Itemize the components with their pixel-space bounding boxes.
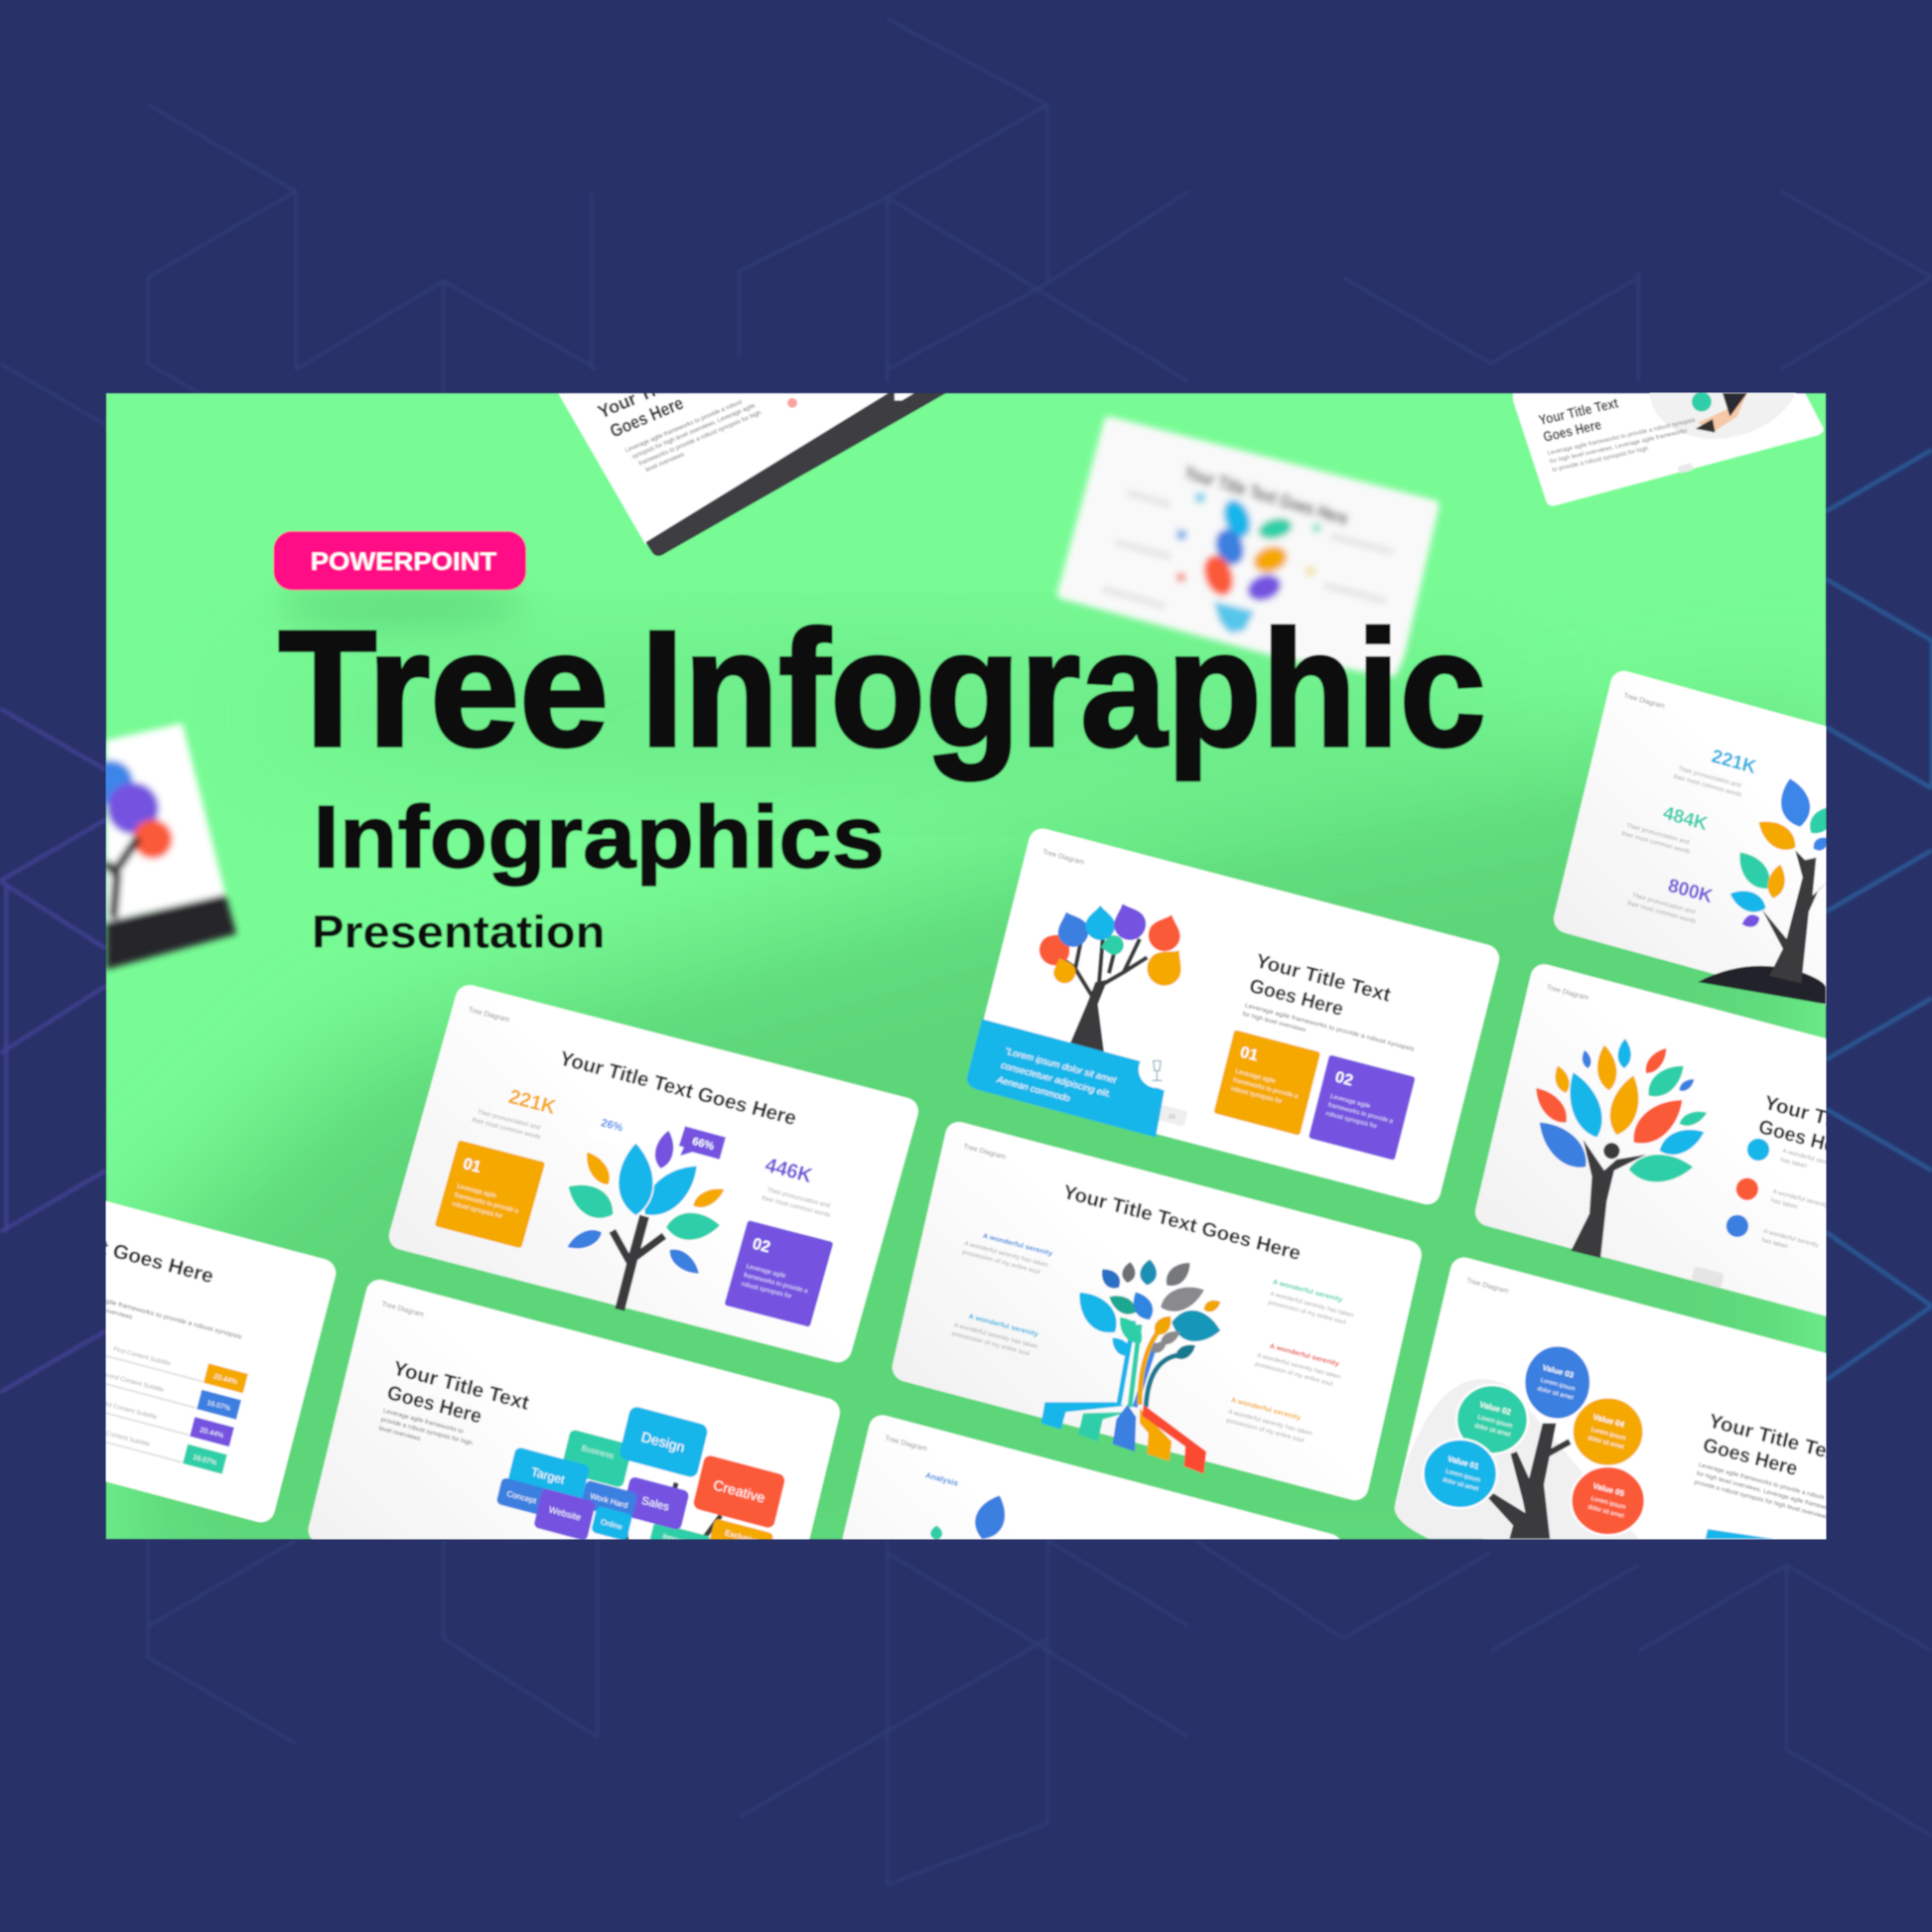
quote band corner [1685,1522,1774,1542]
tag: Tree Diagram: Tree Diagram [1546,983,1589,1002]
tag: Creative: Creative [712,1477,766,1507]
title text: Your Title Text [1707,1411,1847,1467]
tree illustration [1698,775,1841,1004]
body text: Leverage agile frameworks to provide a robust synopsis [70,1289,242,1340]
page number [1157,1104,1187,1127]
tag: Work Hard [580,1480,638,1521]
egg: Value 04: Lorem ipsum [1590,1426,1626,1442]
box: 02 [724,1220,834,1327]
row 1 [111,1339,248,1393]
box: 01: Leverage agile [456,1182,497,1200]
card: slide with drop tree and blue band: for high level overviews [1242,1011,1307,1034]
box: 01: robust synopsis for [452,1200,503,1220]
card: right upper slide with 221K stats: Their pronunciation and [1631,892,1697,916]
item: orange: A wonderful serenity has taken [1228,1409,1313,1438]
egg: Value 05: Value 05 [1592,1481,1625,1498]
tag: Website: Website [548,1504,582,1523]
tag: Innovation [644,1522,712,1576]
card: blurred slide behind title: Your Title Text Goes Here [1181,462,1351,530]
item: red: possession of my entire soul [1254,1360,1333,1388]
tag: Business [560,1429,632,1488]
tag: Tree Diagram: Tree Diagram [381,1300,425,1318]
tag: Concept: Concept [506,1489,538,1506]
egg: Value 03: dolor sit amet [1537,1385,1575,1402]
body text: Leverage agile frameworks to [382,1408,465,1436]
card: right upper slide with 221K stats: Their pronunciation and [1626,822,1691,846]
card: slide with stats and leaf tree: Their pronunciation and [766,1186,831,1209]
box: 01: frameworks to provide a [454,1191,519,1215]
card: slide with tag tree: provide a robust synopsis for high [380,1416,474,1448]
egg: Value 01: Value 01 [1447,1454,1480,1471]
stat: 484K: 484K [1661,803,1710,835]
card: top right slide [1513,310,1824,506]
badge: POWERPOINT [274,531,526,590]
card: slide with tag tree: Goes Here [385,1382,483,1428]
tree illustration [1034,898,1192,1052]
title text: Your Ti [595,380,658,423]
callout: 26%: 26% [600,1117,624,1135]
item: orange [1226,1396,1316,1446]
egg: Value 01 [1423,1440,1497,1508]
tag: Work Hard: Work Hard [589,1491,629,1510]
subtitle: Presentation: Presentation [312,905,605,957]
panel: green hero [105,393,1827,1539]
item: blue: A wonderful serenity [982,1232,1053,1258]
tag: Tree Diagram: Tree Diagram [1623,692,1666,711]
title text [1537,397,1696,473]
title text: Goes Here [1542,417,1603,446]
title: Tree Infographic: Tree [278,597,609,781]
egg: Value 01: dolor sit amet [1442,1476,1479,1493]
leaf tree illustration [560,1128,729,1310]
quote band [967,1019,1175,1138]
callout: 66%: 66% [691,1136,716,1153]
subtitle: Infographics: Infographics [313,787,885,887]
box: 01: 01 [461,1155,483,1176]
leaf icon [930,1490,1013,1544]
egg: Value 02: Value 02 [1478,1400,1512,1417]
egg: Value 03 [1524,1345,1590,1420]
row 2: 16.07% [207,1399,232,1413]
egg: Value 01: Lorem ipsum [1445,1468,1481,1484]
tag: Innovation: Innovation [662,1532,698,1550]
row 3: 20.44% [199,1426,225,1440]
title text: Your Title Text [1762,1092,1902,1149]
tag: Creative [692,1454,786,1529]
item: teal right [1268,1278,1358,1327]
tag: Online [591,1505,632,1541]
quote band: Aenean commodo [995,1074,1071,1104]
tag: Concept [496,1477,549,1516]
tag: Exclusive [704,1518,774,1578]
card: top centre slide [558,345,946,556]
tag: Exclusive: Exclusive [724,1528,759,1546]
item: teal left: possession of my entire soul [951,1330,1031,1357]
body text: Leverage agile frameworks to provide a robust [1698,1461,1825,1501]
tree trunk [1488,1423,1556,1539]
title text [596,393,761,473]
card: slide with person tree: Goes Here [1756,1116,1855,1163]
tag: Business: Business [581,1444,615,1460]
egg: Value 03: Value 03 [1542,1363,1576,1380]
box: 02: frameworks to provide a [1327,1101,1394,1125]
badge: POWERPOINT: POWERPOINT [311,549,496,576]
row 3: Third Content Subtitle [96,1399,158,1421]
quote band: consectetuer adipiscing elit. [1000,1060,1112,1099]
egg: Value 04: Value 04 [1592,1413,1625,1430]
title text: Leverage agile frameworks to provide a robust synopsis [1547,417,1696,457]
title text: Your Title Text [1254,950,1393,1007]
card: slide with tag tree [306,1277,843,1666]
item: teal right: A wonderful serenity [1272,1278,1343,1304]
box: 01 [1213,1030,1320,1136]
stat: 221K: 221K [1710,746,1758,778]
body text: Leverage agile frameworks to provide a robust synopsis [1244,1002,1415,1053]
egg: Value 02: Lorem ipsum [1477,1414,1513,1430]
row 4 [84,1418,227,1474]
title text: Your Title Text Goes Here [1061,1181,1303,1265]
title text: Your Title Text [1537,395,1620,429]
row 2: Second Content Subtitle [97,1370,165,1394]
title text: Goes Here [607,392,686,442]
title: Tree Infographic: Infographic [640,597,1486,781]
callout: 66% [679,1126,726,1160]
item: red [1254,1339,1345,1390]
card: slide with value eggs: Goes Here [1701,1435,1799,1480]
item: orange: A wonderful serenity [1230,1396,1302,1422]
tag: Tree Diagram: Tree Diagram [963,1143,1007,1161]
stat: 221K: 221K [506,1086,559,1119]
row 4: 16.07% [192,1453,218,1467]
card: slide with drop tree and blue band [967,826,1502,1207]
item: red: A wonderful serenity has taken [1256,1352,1342,1381]
title text: to provide a robust synopsis for high [1552,445,1649,474]
box: 02: robust synopsis for [741,1281,792,1301]
card: slide with tag tree: level overviews [378,1425,421,1443]
tag: Target [506,1447,590,1505]
card: slide with person tree [1472,961,1932,1348]
tag: Tree Diagram: Tree Diagram [1465,1277,1509,1296]
tag: Tree Diagram: Tree Diagram [468,1006,510,1024]
card: slide with person tree: A wonderful serenity [1772,1188,1830,1209]
tag: Target: Target [530,1464,567,1487]
ribbon tree illustration [1041,1257,1223,1473]
card: blurred slide behind title [1062,421,1435,671]
box: 02: robust synopsis for [1325,1110,1378,1130]
icons: list bullets [1726,1139,1769,1237]
box: 02 [1309,1054,1416,1161]
egg: Value 05 [1571,1466,1645,1535]
item: blue: possession of my entire soul [962,1249,1040,1276]
egg: Value 05: Lorem ipsum [1590,1495,1626,1511]
card: right upper slide with 221K stats: their most common words [1626,899,1697,925]
egg: Value 04 [1573,1397,1644,1466]
title: Tree Infographic [278,597,1486,781]
title text: level overviews [644,451,686,474]
card: slide with person tree: has taken [1761,1237,1789,1250]
row 3 [95,1392,234,1447]
tag: Online: Online [600,1517,623,1532]
box: 01: 01 [1238,1043,1260,1065]
tree illustration [1529,1038,1709,1258]
item: blue [962,1228,1053,1278]
item: orange: possession of my entire soul [1226,1417,1305,1445]
item: teal left: A wonderful serenity [968,1312,1039,1338]
box: 01: Leverage agile [1235,1068,1277,1085]
egg: Value 02 [1456,1385,1528,1453]
title text: Leverage agile frameworks to provide a robust [624,398,744,455]
box: 02: 02 [751,1235,772,1257]
egg: Value 02: dolor sit amet [1473,1422,1511,1439]
tag: Tree Diagram: Tree Diagram [885,1435,928,1453]
egg: Value 05: dolor sit amet [1587,1503,1625,1520]
row 1: First Content Subtitle [112,1345,172,1368]
tag: Sales [621,1476,690,1531]
tag: Website [533,1488,596,1541]
card: blurred left slide [88,724,236,970]
item: teal left: A wonderful serenity has taken [953,1321,1038,1350]
card: right upper slide with 221K stats: Their pronunciation and [1678,765,1742,789]
box: 01 [435,1140,545,1248]
box: 02: Leverage agile [746,1263,787,1280]
stat: 800K: 800K [1666,876,1715,907]
card: slide with stats and leaf tree [386,982,921,1365]
stat: 446K: 446K [762,1155,815,1187]
card: slide with drop tree and blue band: Goes Here [1247,975,1345,1021]
tag: Tree Diagram: Tree Diagram [1041,849,1085,867]
card: bottom slide with Analysis [811,1412,1345,1799]
tag: Design [619,1405,709,1478]
card: slide with stats and leaf tree: Their pronunciation and [477,1109,541,1132]
card: slide with value eggs: for high level overviews. Leverage agile frameworks [1696,1470,1838,1514]
box: 02: Leverage agile [1329,1093,1371,1110]
item: teal right: A wonderful serenity has taken [1270,1291,1355,1319]
box: 01: robust synopsis for [1230,1085,1283,1105]
card: slide with stats and leaf tree: their most common words [472,1117,541,1141]
card: right upper slide with 221K stats: their most common words [1673,773,1742,798]
card: slide with person tree: has taken [1770,1197,1799,1211]
card: left slide with table: for high level overviews [68,1298,133,1321]
card: slide with person tree: A wonderful serenity [1763,1228,1820,1249]
page number: 20 [1168,1113,1176,1121]
box: 01: frameworks to provide a [1232,1076,1300,1100]
title text: Your Title Text [391,1358,531,1415]
card: slide with value eggs [1392,1254,1927,1641]
tag: Design: Design [639,1430,686,1456]
quote band: "Lorem ipsum dolor sit amet [1004,1045,1118,1085]
card: slide with stats and leaf tree: their most common words [760,1194,831,1219]
item: blue: A wonderful serenity has taken [964,1240,1049,1269]
title text: Your Title Text Goes Here [557,1047,799,1130]
label: Analysis: Analysis [924,1470,959,1488]
card: slide with ribbon tree [890,1119,1425,1503]
title text: frameworks to provide a robust synopsis for high [637,409,762,468]
card: slide with person tree: has taken [1780,1157,1808,1171]
card: right upper slide with 221K stats [1553,669,1827,1007]
item: red: A wonderful serenity [1269,1342,1340,1368]
egg: Value 03: Lorem ipsum [1540,1377,1576,1393]
box: 02: frameworks to provide a [743,1272,809,1295]
item: teal right: possession of my entire soul [1268,1299,1346,1326]
callout: 26% [589,1111,631,1147]
list text: A wonderful serenity [1782,1148,1839,1170]
row 1: 20.44% [212,1372,239,1387]
title text: synopsis for high level overviews. Leverage agile [631,402,757,461]
egg: Value 04: dolor sit amet [1587,1435,1625,1450]
card: right upper slide with 221K stats: their most common words [1621,830,1691,856]
card: left slide with table [0,1138,339,1525]
item: teal left [951,1310,1041,1359]
card: slide with value eggs: provide a robust synopsis for high level overviews [1694,1479,1830,1521]
box: 02: 02 [1333,1068,1355,1090]
row 2 [95,1363,241,1420]
title text: for high level overviews. Leverage agile frameworks [1549,428,1688,466]
row 4: Fourth Content Subtitle [86,1425,151,1449]
tag: Sales: Sales [640,1495,670,1514]
